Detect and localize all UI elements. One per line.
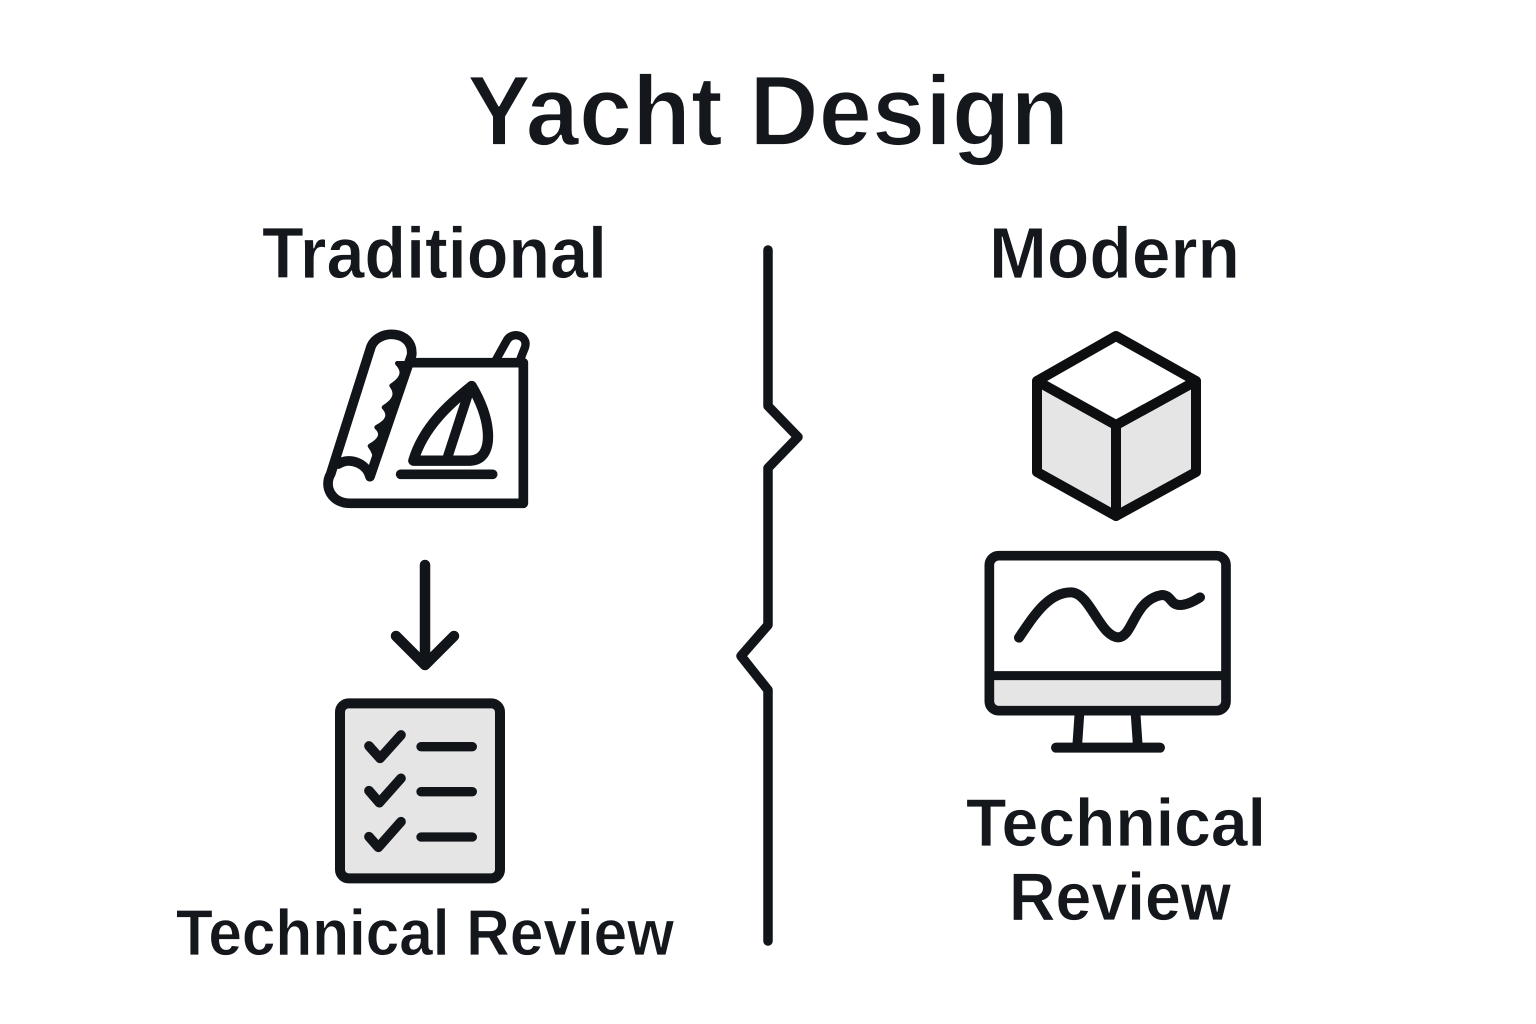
icon: computer monitor with curve: [989, 556, 1226, 748]
icon: blueprint scroll with sailboat: [328, 334, 526, 503]
label: modern technical review: Technical: [966, 785, 1266, 861]
divider: zigzag line: [741, 250, 798, 941]
icon: 3D cube: [1037, 336, 1196, 516]
title: Yacht Design: [467, 55, 1069, 166]
arrow: traditional flow down: [396, 565, 454, 665]
heading: modern: Modern: [989, 214, 1240, 294]
heading: traditional: Traditional: [262, 214, 607, 294]
label: traditional technical review: Technical Review: [176, 896, 674, 969]
label: modern technical review: [966, 785, 1266, 935]
icon: checklist: [340, 703, 500, 878]
label: modern technical review: Review: [1009, 859, 1232, 935]
